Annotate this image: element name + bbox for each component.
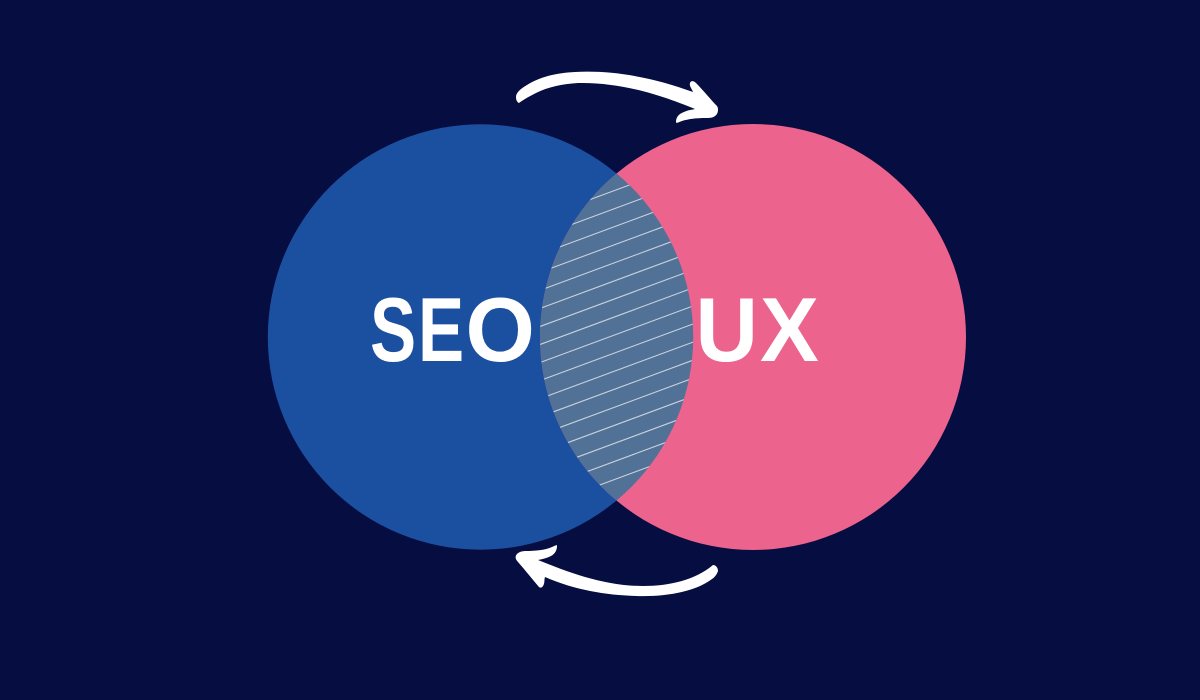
label: SEO: S	[370, 280, 416, 381]
label: SEO	[370, 279, 535, 381]
label: SEO: E	[418, 280, 464, 381]
arrow: top, SEO to UX	[516, 72, 718, 123]
venn diagram infographic	[268, 72, 966, 596]
circle: SEO	[268, 124, 693, 550]
arrow: bottom, UX to SEO	[516, 545, 718, 596]
overlap: hatched intersection	[540, 174, 694, 500]
label: UX: U	[696, 279, 758, 380]
label: UX: X	[760, 279, 819, 380]
label: SEO: O	[466, 279, 535, 381]
circle: UX	[540, 124, 966, 550]
label: UX	[696, 279, 819, 380]
